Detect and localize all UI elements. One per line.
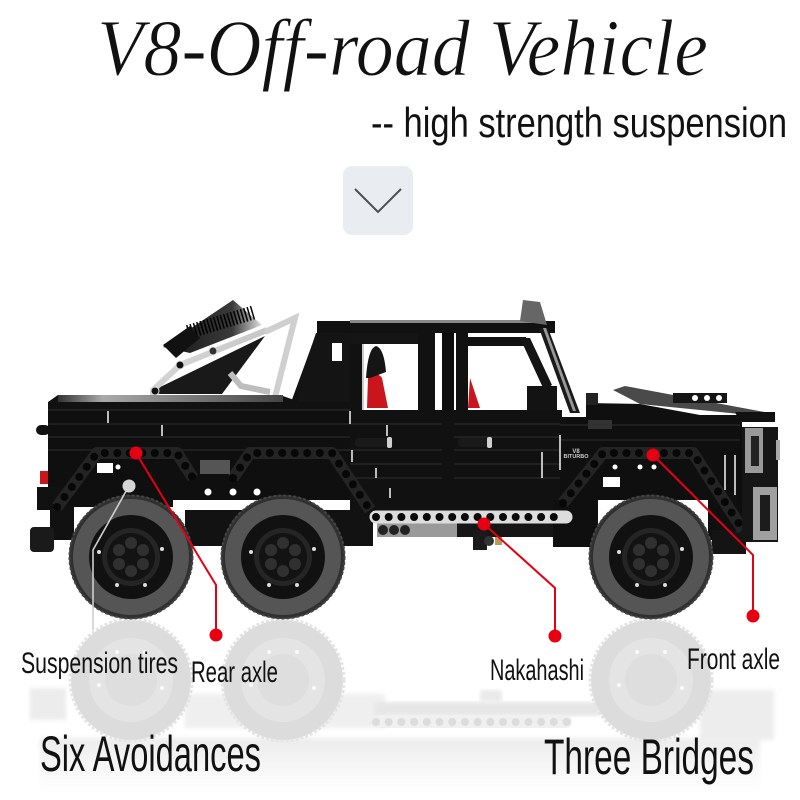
small white holes bbox=[97, 463, 656, 496]
title: V8-Off-road Vehicle bbox=[97, 5, 708, 93]
panel lines bbox=[48, 410, 740, 478]
badge: V8 biturbo: BITURBO bbox=[563, 454, 589, 460]
callout: suspension tires pointer bbox=[93, 480, 136, 630]
badge: V8 biturbo bbox=[563, 449, 589, 460]
wheels bbox=[70, 496, 712, 618]
reflection of truck bbox=[30, 619, 774, 792]
callout: front axle pointer bbox=[646, 448, 760, 622]
rear details bbox=[30, 425, 74, 552]
chassis bbox=[185, 500, 746, 554]
label: rear axle: Rear axle bbox=[191, 656, 278, 689]
badge: V8 biturbo: V8 bbox=[572, 449, 580, 455]
callout: rear axle pointer bbox=[130, 446, 222, 642]
truck bbox=[30, 300, 780, 618]
label: nakahashi: Nakahashi bbox=[490, 654, 584, 687]
door handles bbox=[355, 437, 492, 448]
grille bbox=[742, 427, 780, 542]
heading: six avoidances: Six Avoidances bbox=[40, 726, 261, 782]
seats bbox=[366, 346, 480, 408]
cab frame bbox=[290, 300, 580, 498]
license plate bbox=[200, 460, 230, 474]
down chevron button bbox=[343, 166, 413, 235]
callout: nakahashi pointer bbox=[478, 518, 562, 642]
suspension beams bbox=[57, 453, 743, 530]
bed and body bbox=[48, 386, 770, 540]
hood truss bbox=[673, 393, 775, 422]
label: suspension tires: Suspension tires bbox=[21, 647, 178, 680]
spare tyre bbox=[150, 300, 295, 408]
